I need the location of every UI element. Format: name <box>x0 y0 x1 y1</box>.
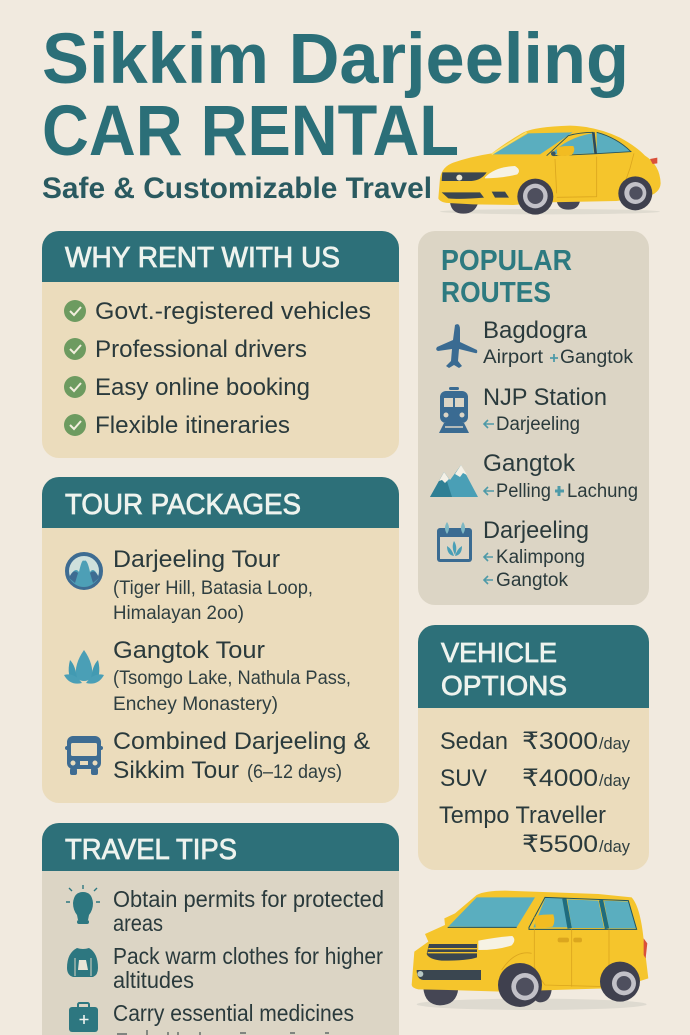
price: suv: SUV <box>440 765 487 792</box>
heading: vehicle options: OPTIONS <box>441 670 567 701</box>
panel: popular routes <box>418 231 649 605</box>
route: gangtok pelling lachung: Lachung <box>567 481 638 502</box>
icon: light bulb <box>66 885 100 924</box>
heading: popular routes: POPULAR <box>441 245 572 277</box>
route: darjeeling kalimpong gangtok: Kalimpong <box>496 547 585 568</box>
item: combined tour <box>113 728 370 784</box>
title <box>42 20 629 171</box>
heading: vehicle options <box>441 637 567 701</box>
icon: train <box>439 387 469 433</box>
panel: why rent with us <box>42 231 399 458</box>
tip: permits <box>113 886 384 936</box>
title: CAR RENTAL <box>42 92 459 171</box>
item: darjeeling tour: Darjeeling Tour <box>113 546 280 573</box>
item: flexible itineraries: Flexible itineraries <box>95 412 290 439</box>
panel: travel tips <box>42 823 399 1035</box>
route: darjeeling kalimpong gangtok: Gangtok <box>496 570 568 591</box>
route: gangtok pelling lachung: Gangtok <box>483 450 576 477</box>
price: tempo traveller: ₹5500 <box>522 831 598 858</box>
icon: lotus <box>64 650 104 684</box>
item: easy online booking: Easy online booking <box>95 374 310 401</box>
icon: mountains <box>430 465 478 497</box>
price: tempo traveller: Tempo Traveller <box>439 802 606 829</box>
panel: vehicle options <box>418 625 649 870</box>
tip: permits: areas <box>113 910 163 936</box>
icon: mountain badge <box>67 554 101 588</box>
price: sedan: /day <box>599 734 630 753</box>
item: gangtok tour: (Tsomgo Lake, Nathula Pass, <box>113 668 351 689</box>
illustration: yellow sedan <box>438 126 661 215</box>
route: bagdogra airport gangtok: Airport <box>483 347 544 368</box>
icon: airplane <box>436 324 477 368</box>
panel: tour packages <box>42 477 399 803</box>
item: darjeeling tour <box>113 546 313 624</box>
route: gangtok pelling lachung <box>483 450 638 502</box>
item: gangtok tour: Gangtok Tour <box>113 637 265 664</box>
heading: travel tips: TRAVEL TIPS <box>65 834 237 866</box>
route: darjeeling kalimpong gangtok: Darjeeling <box>483 517 589 544</box>
title: Sikkim Darjeeling <box>42 20 629 99</box>
route: darjeeling kalimpong gangtok <box>483 517 589 591</box>
illustration: yellow van <box>412 891 648 1010</box>
heading: vehicle options: VEHICLE <box>441 637 557 668</box>
icon: calendar <box>437 522 472 562</box>
icon: warm jacket <box>67 948 98 977</box>
price: tempo traveller: /day <box>599 837 630 856</box>
tip: medicines: Carry essential medicines <box>113 1000 354 1026</box>
price: sedan: Sedan <box>440 728 508 755</box>
route: njp station darjeeling: Darjeeling <box>496 414 580 435</box>
subtitle: Safe & Customizable Travel <box>42 172 432 205</box>
route: njp station darjeeling <box>483 384 607 435</box>
icon: medicine kit <box>69 1003 98 1032</box>
tip: permits: Obtain permits for protected <box>113 886 384 912</box>
item: combined tour: (6–12 days) <box>247 762 342 783</box>
item: professional drivers: Professional drivers <box>95 336 307 363</box>
heading: why rent with us: WHY RENT WITH US <box>65 242 340 274</box>
heading: popular routes: ROUTES <box>441 277 551 309</box>
heading: popular routes <box>441 245 572 309</box>
price: sedan: ₹3000 <box>522 728 598 755</box>
route: gangtok pelling lachung: Pelling <box>496 481 551 502</box>
item: combined tour: Sikkim Tour <box>113 757 239 784</box>
item: combined tour: Combined Darjeeling & <box>113 728 370 755</box>
price: suv <box>440 765 630 792</box>
item: gangtok tour <box>113 637 351 715</box>
item: govt registered: Govt.-registered vehicles <box>95 298 371 325</box>
icon: bus <box>65 736 103 775</box>
tip: warm clothes <box>113 943 383 993</box>
price: suv: ₹4000 <box>522 765 598 792</box>
item: darjeeling tour: Himalayan 2oo) <box>113 603 244 624</box>
item: gangtok tour: Enchey Monastery) <box>113 694 278 715</box>
route: bagdogra airport gangtok: Gangtok <box>560 347 634 368</box>
route: bagdogra airport gangtok: Bagdogra <box>483 317 588 344</box>
route: bagdogra airport gangtok <box>483 317 634 368</box>
tip: warm clothes: Pack warm clothes for higher <box>113 943 383 969</box>
item: darjeeling tour: (Tiger Hill, Batasia Loop, <box>113 578 313 599</box>
price: tempo traveller <box>439 802 630 858</box>
tip: warm clothes: altitudes <box>113 967 194 993</box>
price: sedan <box>440 728 630 755</box>
price: suv: /day <box>599 771 630 790</box>
heading: tour packages: TOUR PACKAGES <box>65 489 301 521</box>
route: njp station darjeeling: NJP Station <box>483 384 607 411</box>
